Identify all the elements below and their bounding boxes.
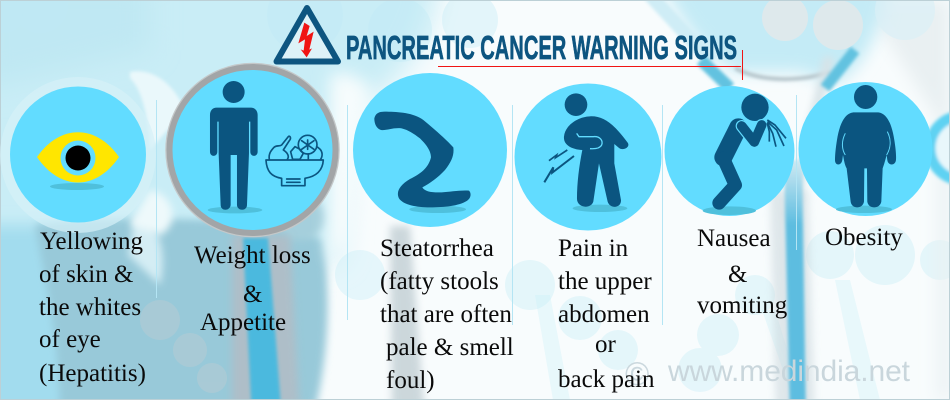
label: abdominal pain: the upper <box>558 268 652 295</box>
label: nausea: & <box>728 261 747 288</box>
icon: eye <box>37 132 119 190</box>
label: abdominal pain: Pain in <box>558 235 629 262</box>
label: nausea: vomiting <box>697 292 788 319</box>
icon: person vomiting <box>703 94 786 215</box>
label: yellowing: the whites <box>39 294 141 321</box>
label: steatorrhea: that are often <box>380 301 512 328</box>
icon: person holding abdomen <box>544 93 628 212</box>
icon: man and salad bowl <box>208 81 323 213</box>
label: abdominal pain: back pain <box>558 366 655 393</box>
watermark: medindia: © <box>625 355 649 392</box>
label: yellowing: (Hepatitis) <box>39 360 146 387</box>
panel: weight loss <box>166 64 339 336</box>
icon: obese person <box>835 85 896 213</box>
label: yellowing: of skin & <box>39 261 133 288</box>
red underline <box>438 50 742 80</box>
panel: yellowing <box>0 77 156 387</box>
label: steatorrhea: (fatty stools <box>380 268 499 295</box>
label: abdominal pain: abdomen <box>558 301 650 328</box>
label: yellowing: Yellowing <box>40 228 144 255</box>
panel: abdominal pain <box>514 84 662 393</box>
title block <box>276 8 742 80</box>
panel: obesity <box>798 82 932 251</box>
label: nausea: Nausea <box>697 225 771 252</box>
icon: warning triangle with lightning bolt <box>276 8 338 62</box>
watermark: medindia: www.medindia.net <box>667 355 911 388</box>
label: obesity: Obesity <box>825 224 903 251</box>
label: yellowing: of eye <box>39 326 101 353</box>
icon: stool <box>374 112 471 213</box>
label: steatorrhea: Steatorrhea <box>380 235 494 262</box>
label: weight loss: & <box>243 281 262 308</box>
label: weight loss: Appetite <box>200 309 286 336</box>
label: steatorrhea: pale & smell <box>386 334 514 361</box>
magnifier ring <box>166 64 339 236</box>
label: abdominal pain: or <box>595 331 616 358</box>
label: weight loss: Weight loss <box>194 242 311 269</box>
panel: nausea <box>664 86 794 319</box>
panel: steatorrhea <box>353 73 514 394</box>
label: steatorrhea: foul) <box>386 367 435 394</box>
